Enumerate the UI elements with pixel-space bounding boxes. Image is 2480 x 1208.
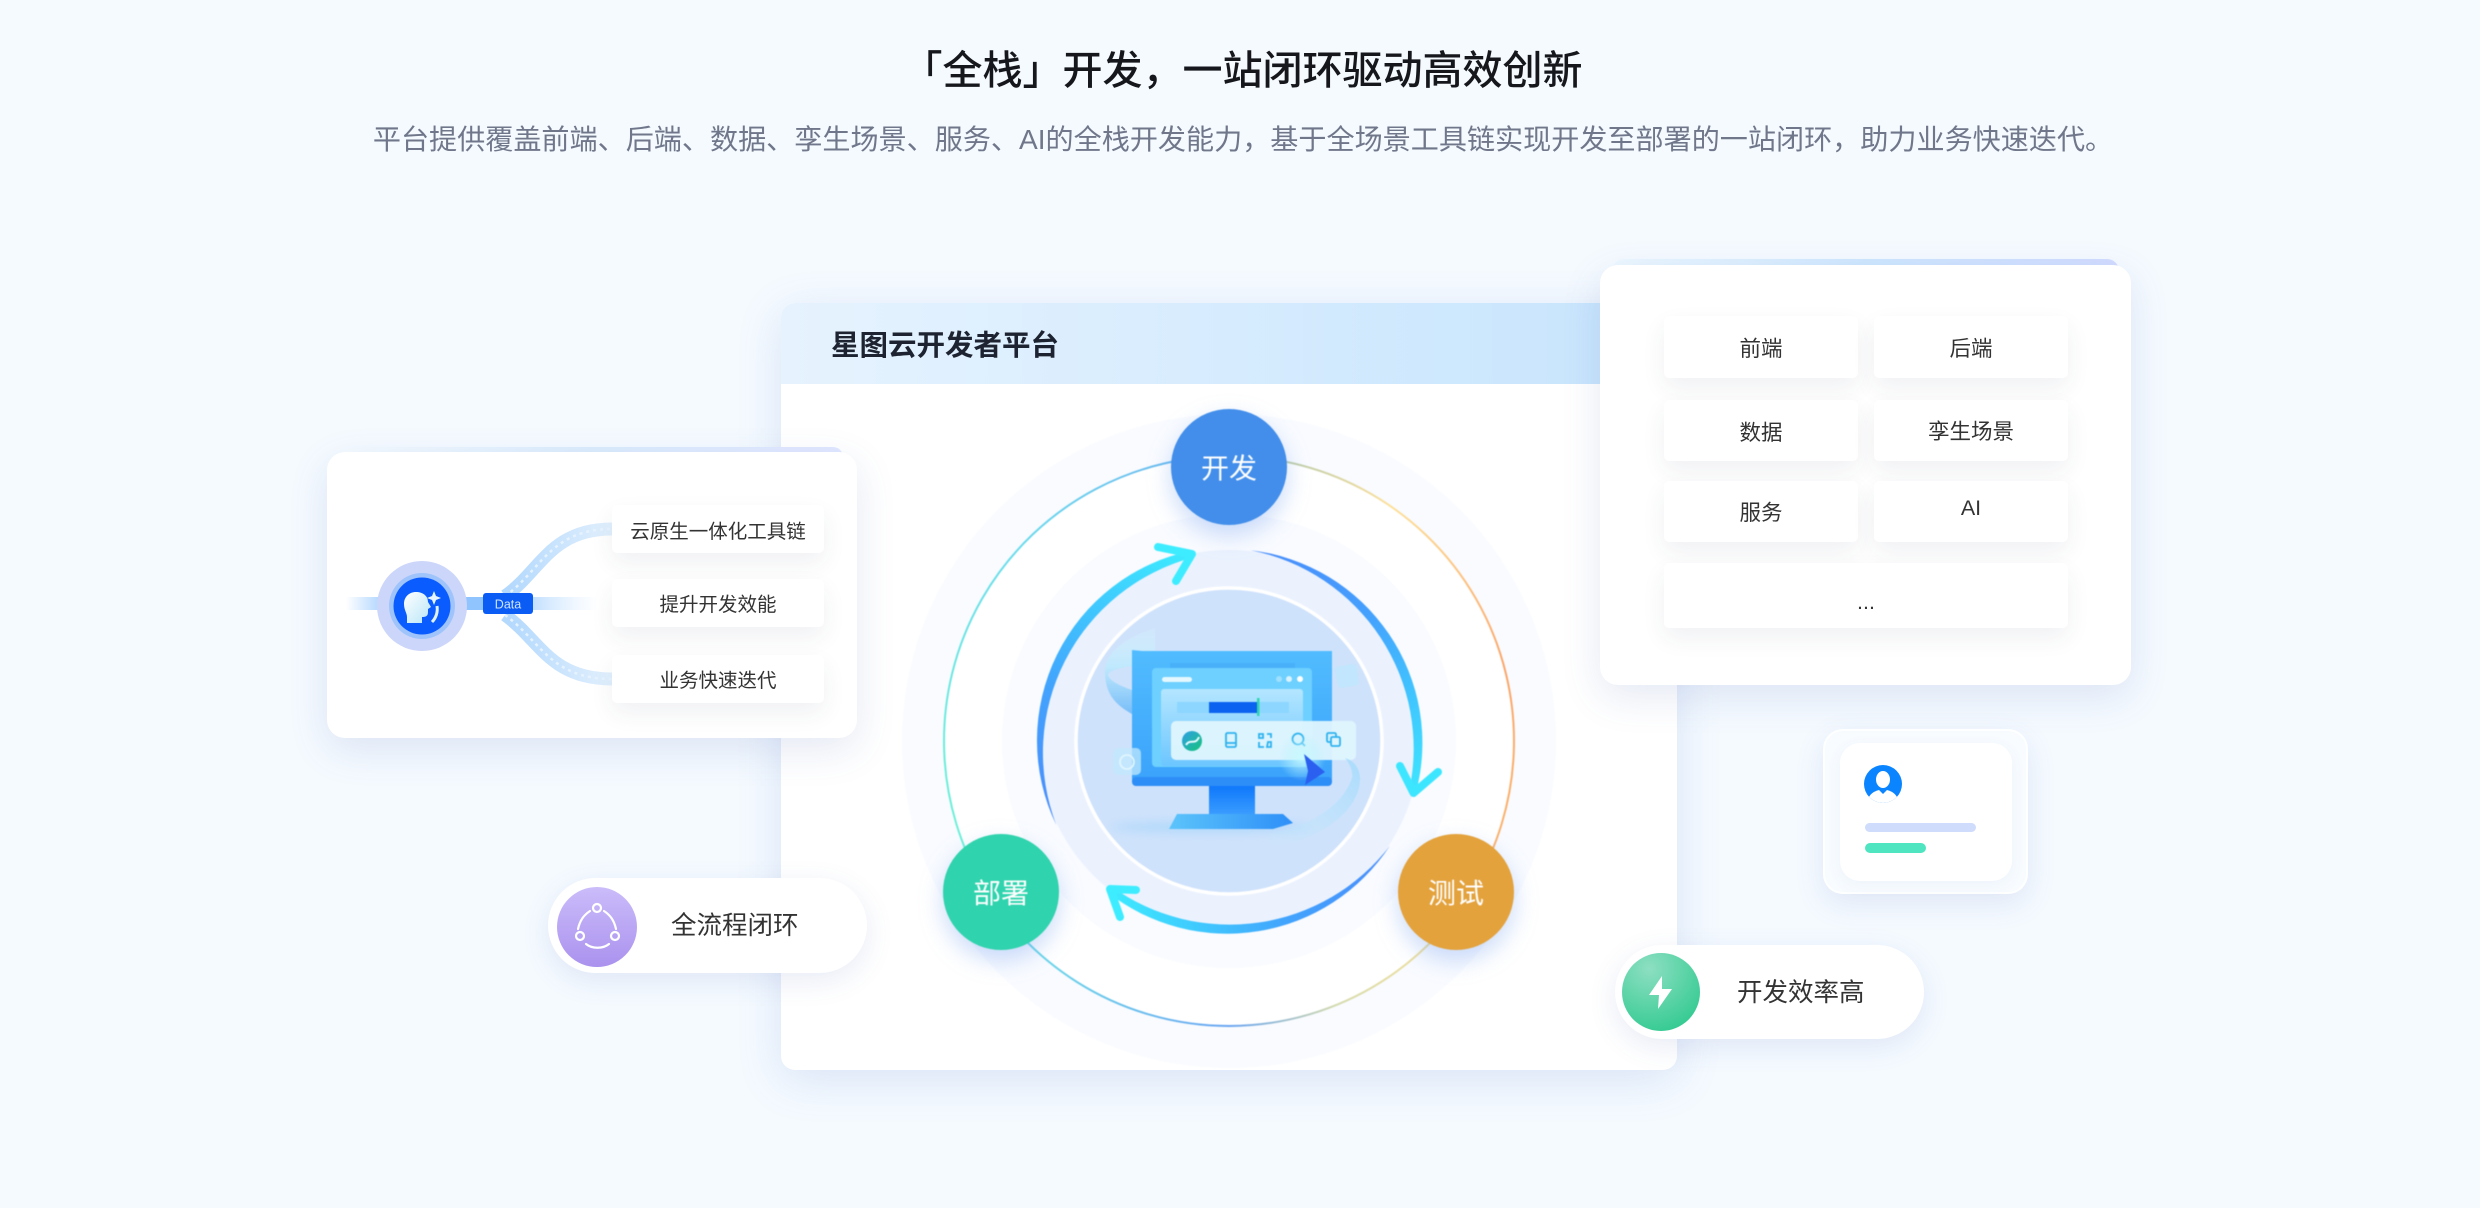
card body [327,452,857,738]
chip: data [1664,400,1858,461]
chip: more: ... [1857,590,1875,614]
chip: service [1664,481,1858,542]
chip: iteration [612,655,824,703]
chip: digital twin: 孪生场景 [1928,420,2014,444]
flow diagram: Data [495,598,521,612]
panel header [781,303,1677,384]
chip: toolchain: 云原生一体化工具链 [630,520,806,542]
panel: platform [781,303,1677,1070]
panel heading: 星图云开发者平台 [831,330,1059,362]
chip: toolchain [612,505,824,553]
chip: frontend: 前端 [1739,336,1782,360]
chip: efficiency: 提升开发效能 [659,594,776,616]
status bar [1865,843,1926,853]
arrow: test to deploy [1107,846,1390,934]
card top accent [341,447,843,459]
node: deploy: 部署 [973,878,1029,909]
card body [1600,265,2131,685]
title: 「全栈」开发，一站闭环驱动高效创新 [902,49,1582,93]
panel: toolchain card [318,447,866,758]
icon: loop [557,887,637,967]
user profile card [1823,729,2028,894]
badge: full process closed loop [548,878,867,973]
chip: backend [1874,316,2068,378]
badge label: 开发效率高 [1737,979,1865,1007]
chip: iteration: 业务快速迭代 [659,670,776,692]
chip: frontend [1664,316,1858,378]
gradient ring [944,456,1514,1026]
card top accent [1612,259,2119,273]
chip: ai [1874,481,2068,542]
subtitle: 平台提供覆盖前端、后端、数据、孪生场景、服务、AI的全栈开发能力，基于全场景工具链实现开发至部署的一站闭环，助力业务快速迭代。 [373,124,2113,155]
monitor illustration [1105,628,1360,846]
node: deploy [943,834,1059,950]
chip: efficiency [612,579,824,627]
chip: more [1664,563,2068,628]
badge label: 全流程闭环 [671,912,799,940]
node: develop: 开发 [1201,453,1257,484]
node: test [1398,834,1514,950]
chip: digital twin [1874,400,2068,461]
icon: lightning [1622,953,1700,1031]
icon: avatar [1864,765,1902,803]
chip: backend: 后端 [1949,336,1992,360]
name bar [1865,823,1976,832]
profile inner [1864,765,1976,853]
chip: service: 服务 [1739,501,1782,525]
badge: high development efficiency [1615,945,1924,1039]
panel: capabilities card [1592,259,2140,706]
arrow: deploy to develop [1037,547,1193,825]
node: test: 测试 [1428,878,1484,909]
background discs [902,414,1556,1068]
chip: ai: AI [1961,496,1981,520]
node: develop [1171,409,1287,525]
chip: data: 数据 [1739,421,1782,445]
flow diagram [350,522,612,686]
arrow: develop to test [1250,550,1438,794]
